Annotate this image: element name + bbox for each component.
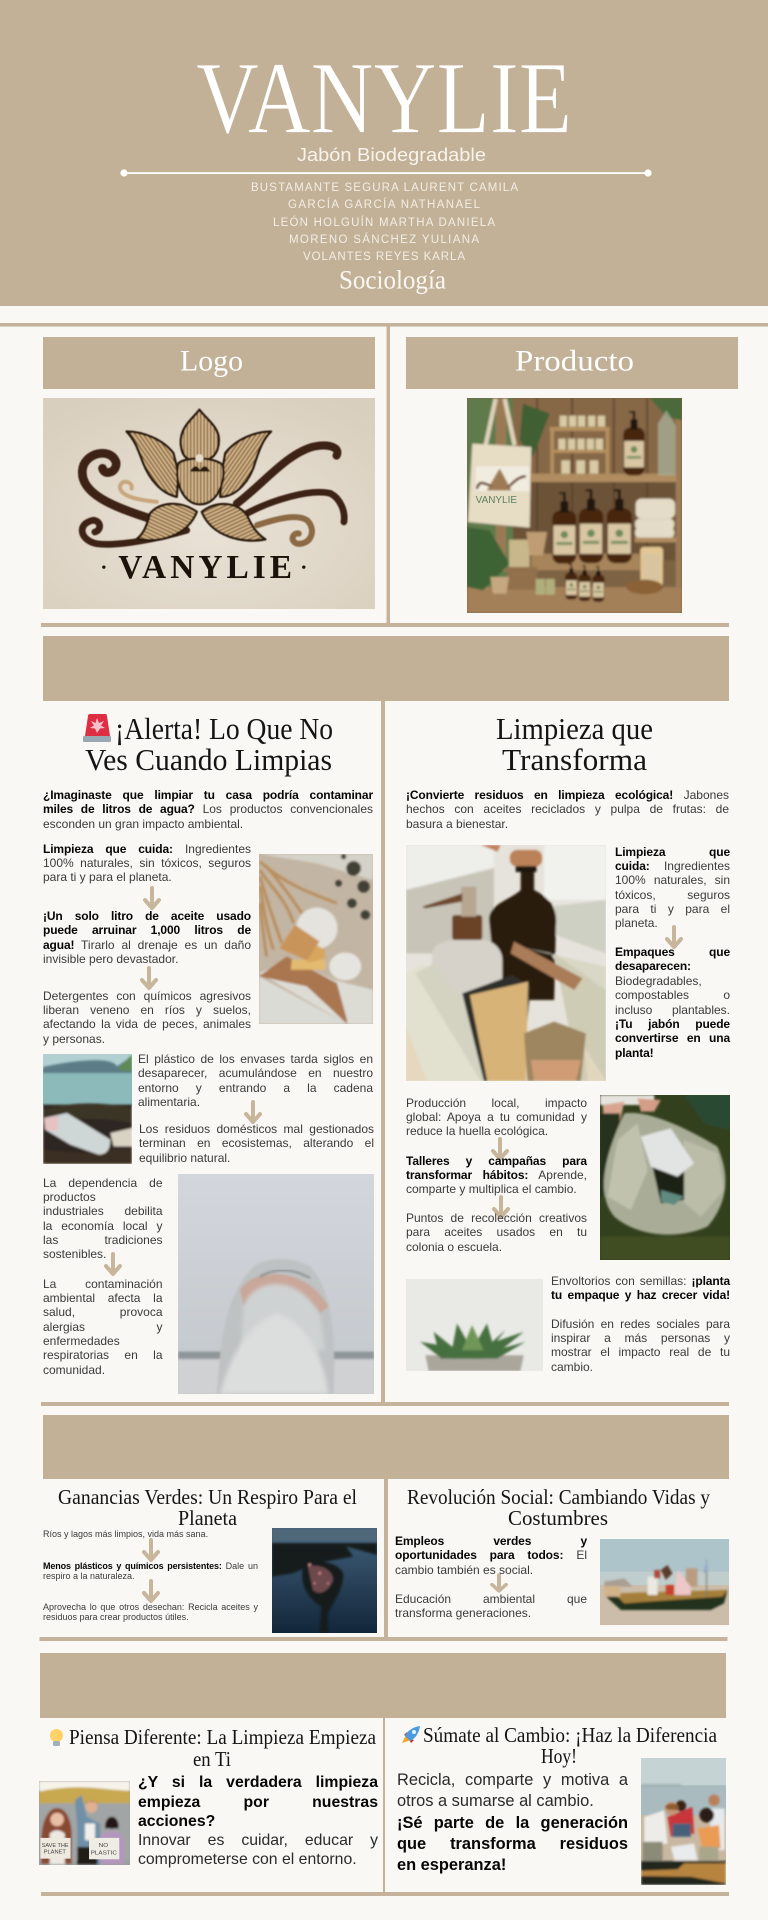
text: intro transforma	[406, 788, 729, 831]
arrow	[493, 1139, 507, 1159]
text: educación ambiental: Educación ambiental que	[395, 1592, 587, 1606]
text: aprovecha: residuos para crear productos útiles.	[43, 1612, 189, 1622]
text: envoltorios: tu empaque y haz crecer vida!	[551, 1288, 730, 1302]
photo: people on boat	[600, 1539, 729, 1625]
heading: alerta: ¡Alerta! Lo Que No	[115, 711, 333, 746]
text: limpieza que cuida: para ti y para el planeta.	[43, 870, 172, 884]
text: producción local: global: Apoya a tu comunidad y	[406, 1110, 587, 1124]
text: contaminación: comunidad.	[43, 1363, 105, 1377]
text: educación ambiental: transforma generaciones.	[395, 1606, 531, 1620]
text: detergentes	[43, 988, 251, 1046]
subject label: Sociología	[339, 266, 446, 295]
text: ríos y lagos: Ríos y lagos más limpios, vida más sana.	[43, 1529, 208, 1539]
text: recicla comparte: Recicla, comparte y motiva a	[397, 1771, 628, 1789]
text: contaminación: alergias y	[43, 1320, 162, 1334]
heading: revolución social: Revolución Social: Cambiando Vidas y	[407, 1485, 710, 1509]
heading: ganancias verdes	[58, 1485, 357, 1530]
text: recicla comparte: en esperanza!	[397, 1856, 506, 1874]
text: producción local: Producción local, impacto	[406, 1096, 587, 1110]
text: limpieza que cuida derecha: cuida: Ingredientes	[615, 859, 730, 873]
photo: protesters with signs: NO	[99, 1843, 108, 1849]
text: empaques: desaparecen:	[615, 959, 691, 973]
heading: alerta	[83, 711, 333, 777]
title: VANYLIE	[196, 42, 572, 156]
text: recicla comparte: otros a sumarse al cambio.	[397, 1792, 594, 1810]
text: intro transforma: basura a bienestar.	[406, 817, 508, 831]
text: un solo litro: invisible pero devastador.	[43, 952, 178, 966]
photo: figure with mask in smoke	[178, 1174, 374, 1394]
arrow	[106, 1254, 120, 1274]
text: limpieza que cuida: 100% naturales, sin tóxicos, seguros	[43, 856, 251, 870]
text: detergentes: afectando la vida de peces, animales	[43, 1017, 251, 1031]
text: menos plásticos: respiro a la naturaleza.	[43, 1571, 135, 1581]
text: verdadera limpieza	[138, 1774, 378, 1868]
text: dependencia: las tradiciones	[43, 1233, 162, 1247]
text: contaminación: La contaminación	[43, 1276, 162, 1290]
image: vanilla flower logo: VANYLIE	[118, 549, 292, 586]
text: residuos: Los residuos domésticos mal gestionados	[139, 1122, 374, 1136]
text: empleos verdes: Empleos verdes y	[395, 1534, 587, 1548]
text: recicla comparte	[397, 1771, 628, 1874]
text: intro alerta: esconden un gran impacto ambiental.	[43, 817, 243, 831]
text: dependencia: sostenibles.	[43, 1247, 106, 1261]
text: empaques: incluso plantables.	[615, 1003, 730, 1017]
text: empaques: Empaques que	[615, 945, 730, 959]
text: residuos: terminan en ecosistemas, alterando el	[139, 1136, 374, 1150]
image: vanilla flower logo	[43, 398, 375, 609]
text: envoltorios: Envoltorios con semillas: ¡planta	[551, 1274, 730, 1288]
text: verdadera limpieza: acciones?	[138, 1813, 215, 1830]
text: producción local	[406, 1096, 587, 1138]
panel: logo heading band	[43, 337, 375, 389]
subtitle: Jabón Biodegradable	[297, 144, 486, 165]
heading: piensa diferente	[50, 1725, 376, 1771]
text: detergentes: y personas.	[43, 1032, 105, 1046]
text: limpieza que cuida derecha: tóxicos, seguros	[615, 888, 730, 902]
text: contaminación: salud, provoca	[43, 1305, 162, 1319]
text: limpieza que cuida	[43, 842, 251, 884]
text: empaques: convertirse en una	[615, 1031, 730, 1045]
text: envoltorios: cambio.	[551, 1360, 593, 1374]
text: plástico: entorno y entrando a la cadena	[138, 1081, 373, 1095]
text: recicla comparte: ¡Sé parte de la generación	[397, 1814, 628, 1832]
photo: bathroom caddy with bottles	[406, 845, 606, 1081]
arrow	[667, 927, 681, 947]
photo: protesters with signs: PLASTIC	[91, 1850, 117, 1856]
text: limpieza que cuida derecha: 100% naturales, sin	[615, 873, 730, 887]
author names: GARCÍA GARCÍA NATHANAEL	[288, 198, 481, 211]
heading: piensa diferente: en Ti	[193, 1747, 231, 1771]
photo: plastic bottle on shore	[43, 1054, 132, 1164]
heading: alerta: Ves Cuando Limpias	[85, 742, 332, 777]
author names: MORENO SÁNCHEZ YULIANA	[289, 233, 479, 246]
heading: limpieza que transforma: Transforma	[502, 742, 647, 777]
text: plástico: alimentaria.	[138, 1095, 200, 1109]
text: recicla comparte: que transforma residuos	[397, 1835, 628, 1853]
text: contaminación: enfermedades	[43, 1334, 120, 1348]
text: un solo litro: ¡Un solo litro de aceite usado	[43, 909, 251, 923]
text: limpieza que cuida derecha: para ti y para el	[615, 902, 730, 916]
photo: trash bag on moss	[600, 1095, 730, 1260]
text: contaminación	[43, 1276, 163, 1377]
photo: aerial island in lake	[272, 1528, 377, 1633]
heading: ganancias verdes: Ganancias Verdes: Un Respiro Para el	[58, 1485, 357, 1509]
text: dependencia	[43, 1176, 163, 1261]
heading: piensa diferente: Piensa Diferente: La Limpieza Empieza	[69, 1725, 376, 1749]
image: product shelf	[467, 398, 682, 613]
text: contaminación: respiratorias en la	[43, 1348, 162, 1362]
text: limpieza que cuida derecha	[615, 844, 730, 930]
text: producción local: reduce la huella ecológica.	[406, 1124, 548, 1138]
heading: súmate al cambio: Hoy!	[541, 1744, 577, 1768]
arrow	[144, 1581, 158, 1601]
photo: protesters with signs: SAVE THE	[42, 1843, 69, 1849]
text: talleres: transformar hábitos: Aprende,	[406, 1168, 587, 1182]
text: envoltorios: inspirar a más personas y	[551, 1331, 730, 1345]
icon: rocket	[402, 1726, 420, 1743]
text: dependencia: productos	[43, 1190, 96, 1204]
arrow	[142, 968, 156, 988]
text: envoltorios: mostrar el impacto real de tu	[551, 1345, 730, 1359]
text: intro alerta	[43, 788, 373, 831]
divider with end dots	[120, 169, 652, 177]
text: puntos de recolección: colonia o escuela.	[406, 1240, 502, 1254]
text: envoltorios	[551, 1274, 730, 1374]
text: plástico: El plástico de los envases tarda siglos en	[138, 1052, 373, 1066]
text: puntos de recolección: Puntos de recolección creativos	[406, 1211, 587, 1225]
heading: súmate al cambio: Súmate al Cambio: ¡Haz la Diferencia	[423, 1723, 717, 1747]
heading: revolución social: Costumbres	[508, 1506, 608, 1530]
text: residuos: equilibrio natural.	[139, 1151, 230, 1165]
photo: protesters with signs: PLANET	[44, 1850, 67, 1856]
text: un solo litro: puede arruinar 1,000 litros de	[43, 923, 251, 937]
text: menos plásticos: Menos plásticos y químicos persistentes: Dale un	[43, 1561, 258, 1571]
arrow	[145, 888, 159, 908]
header band	[0, 0, 768, 306]
text: verdadera limpieza: comprometerse con el entorno.	[138, 1851, 357, 1868]
panel: section band 4	[40, 1653, 726, 1718]
heading: limpieza que transforma: Limpieza que	[496, 711, 653, 746]
heading: revolución social	[407, 1485, 710, 1530]
text: empaques: planta!	[615, 1046, 654, 1060]
heading: súmate al cambio	[402, 1723, 717, 1768]
text: limpieza que cuida: Limpieza que cuida: Ingredientes	[43, 842, 251, 856]
text: envoltorios: Difusión en redes sociales para	[551, 1317, 730, 1331]
text: intro transforma: hechos con aceites reciclados y pulpa de frutas: de	[406, 802, 729, 816]
text: dependencia: La dependencia de	[43, 1176, 162, 1190]
text: dependencia: la economía local y	[43, 1219, 162, 1233]
panel: section band 2	[43, 636, 729, 701]
text: educación ambiental	[395, 1592, 587, 1620]
text: empleos verdes: oportunidades para todos: El	[395, 1548, 587, 1562]
author names	[251, 182, 518, 263]
text: intro alerta: ¿Imaginaste que limpiar tu casa podría contaminar	[43, 788, 373, 802]
text: empaques: Biodegradables,	[615, 974, 702, 988]
photo: protesters with signs	[39, 1781, 130, 1865]
text: empaques	[615, 945, 730, 1060]
text: talleres: Talleres y campañas para	[406, 1154, 587, 1168]
text: talleres: comparte y multiplica el cambio.	[406, 1182, 577, 1196]
text: aprovecha	[43, 1602, 258, 1622]
photo: children collecting waste	[641, 1758, 726, 1885]
text: detergentes: liberan veneno en ríos y suelos,	[43, 1003, 251, 1017]
text: residuos	[139, 1122, 374, 1165]
panel: logo heading band: Logo	[180, 345, 243, 378]
text: talleres	[406, 1154, 588, 1196]
text: plástico: desaparecer, acumulándose en nuestro	[138, 1066, 373, 1080]
text: aprovecha: Aprovecha lo que otros desechan: Recicla aceites y	[43, 1602, 258, 1612]
panel: product heading band	[406, 337, 738, 389]
panel: product heading band: Producto	[515, 345, 634, 378]
text: un solo litro: agua! Tirarlo al drenaje es un daño	[43, 938, 251, 952]
image: product shelf: VANYLIE	[476, 495, 517, 506]
text: empleos verdes	[395, 1534, 588, 1577]
text: menos plásticos	[43, 1561, 258, 1581]
text: limpieza que cuida derecha: Limpieza que	[615, 844, 730, 858]
text: verdadera limpieza: ¿Y si la verdadera limpieza	[138, 1774, 378, 1791]
text: limpieza que cuida derecha: planeta.	[615, 916, 658, 930]
text: empaques: ¡Tu jabón puede	[615, 1017, 730, 1031]
text: verdadera limpieza: empieza por nuestras	[138, 1794, 378, 1811]
arrow	[144, 1540, 158, 1560]
text: plástico	[138, 1052, 374, 1109]
arrow	[246, 1102, 260, 1122]
text: un solo litro	[43, 909, 251, 966]
author names: BUSTAMANTE SEGURA LAURENT CAMILA	[251, 182, 518, 194]
photo: soap on wooden board	[259, 854, 373, 1024]
text: verdadera limpieza: Innovar es cuidar, educar y	[138, 1832, 378, 1849]
heading: limpieza que transforma	[496, 711, 653, 777]
text: intro transforma: ¡Convierte residuos en limpieza ecológica! Jabones	[406, 788, 729, 802]
text: intro alerta: miles de litros de agua? Los productos convencionales	[43, 802, 373, 816]
icon: alarm light	[83, 714, 111, 742]
author names: VOLANTES REYES KARLA	[303, 251, 465, 263]
author names: LEÓN HOLGUÍN MARTHA DANIELA	[273, 216, 495, 229]
text: empleos verdes: cambio también es social.	[395, 1563, 533, 1577]
text: contaminación: ambiental afecta la	[43, 1291, 162, 1305]
panel: section band 3	[43, 1415, 729, 1479]
text: puntos de recolección: para aceites usados en tu	[406, 1225, 587, 1239]
photo: succulent plant	[406, 1279, 543, 1371]
text: detergentes: Detergentes con químicos agresivos	[43, 988, 251, 1002]
arrow	[494, 1197, 508, 1217]
arrow	[492, 1575, 506, 1591]
text: empaques: compostables o	[615, 988, 730, 1002]
heading: ganancias verdes: Planeta	[178, 1506, 237, 1530]
icon: light bulb	[50, 1729, 63, 1746]
text: puntos de recolección	[406, 1211, 587, 1254]
text: dependencia: industriales debilita	[43, 1204, 162, 1218]
